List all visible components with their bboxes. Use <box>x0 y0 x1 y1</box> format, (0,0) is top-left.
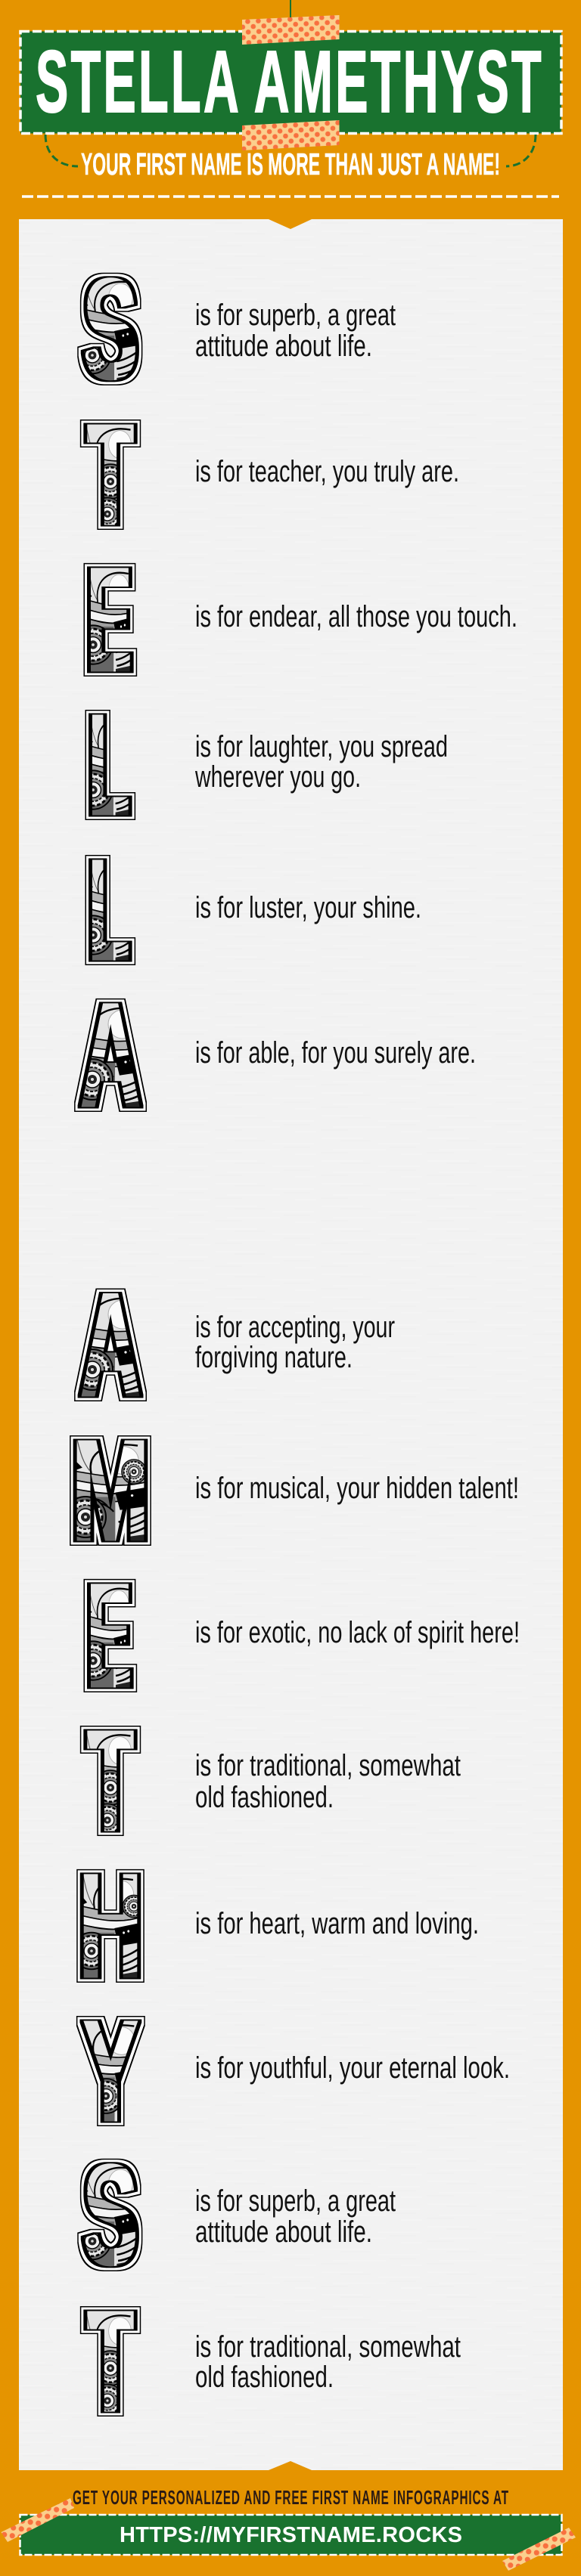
connector: left <box>45 135 78 166</box>
letter Y: Y <box>83 1992 138 2151</box>
letter A: A <box>80 1263 141 1427</box>
text: traditional: is for traditional, somewhat <box>195 2330 461 2364</box>
text: superb <box>195 2184 396 2249</box>
connector: right <box>506 135 536 166</box>
row: L for luster: L <box>89 831 130 990</box>
row: E for endear: E <box>87 537 132 702</box>
row: T for traditional (second) <box>87 2282 461 2441</box>
text: superb <box>195 299 396 363</box>
letter T: T <box>87 2282 134 2441</box>
row: A for able <box>80 973 476 1138</box>
text: traditional <box>195 1749 461 1814</box>
tape: top <box>242 15 339 45</box>
footer url: HTTPS://MYFIRSTNAME.ROCKS <box>120 2523 462 2547</box>
row: H for heart <box>79 1844 479 2008</box>
tape: bottom <box>242 120 339 150</box>
letter S: S <box>83 249 138 408</box>
row: L for laughter: L <box>89 686 130 845</box>
text: superb: attitude about life. <box>195 2215 372 2249</box>
row: L for luster <box>89 831 421 990</box>
text: accepting <box>195 1311 395 1374</box>
row: E for endear <box>87 537 517 702</box>
row: T for traditional <box>87 1701 461 1861</box>
tape: footer right <box>502 2528 576 2571</box>
row: Y for youthful <box>83 1992 510 2151</box>
row: S for superb (second) <box>83 2135 396 2294</box>
row: T for teacher <box>87 395 459 555</box>
letter T: T <box>87 395 134 555</box>
text: traditional <box>195 2330 461 2394</box>
text: traditional: is for traditional, somewhat <box>195 1749 461 1782</box>
row: L for laughter <box>89 686 448 845</box>
row: A for accepting <box>80 1263 395 1427</box>
text: laughter: wherever you go. <box>194 760 361 794</box>
text: superb: attitude about life. <box>195 330 372 363</box>
text: teacher: is for teacher, you truly are. <box>195 455 459 488</box>
text: accepting: forgiving nature. <box>195 1341 353 1374</box>
panel bottom notch <box>269 2461 312 2470</box>
hanging string <box>290 0 291 20</box>
row: M for musical <box>71 1411 519 1571</box>
letter A: A <box>80 973 141 1138</box>
text: laughter <box>194 730 448 794</box>
text: heart: is for heart, warm and loving. <box>195 1907 479 1940</box>
letter M: M <box>71 1411 150 1571</box>
tape: footer left <box>2 2498 74 2542</box>
letter T: T <box>87 1701 134 1861</box>
letter H: H <box>79 1844 142 2008</box>
text: traditional: old fashioned. <box>195 1781 334 1814</box>
text: accepting: is for accepting, your <box>195 1311 395 1344</box>
footer banner <box>20 2515 561 2555</box>
header <box>20 0 561 181</box>
title banner <box>20 32 561 133</box>
text: laughter: is for laughter, you spread <box>195 730 448 763</box>
text: able: is for able, for you surely are. <box>195 1036 476 1070</box>
text: superb: is for superb, a great <box>195 2184 396 2218</box>
row: E for exotic: E <box>87 1553 132 1718</box>
letter S: S <box>83 2135 138 2294</box>
text: luster: is for luster, your shine. <box>195 891 421 924</box>
text: superb: is for superb, a great <box>195 299 396 332</box>
row: E for exotic <box>87 1553 520 1718</box>
row: S for superb <box>83 249 396 408</box>
panel top notch <box>269 219 312 229</box>
text: traditional: old fashioned. <box>195 2361 334 2394</box>
footer <box>2 2486 576 2571</box>
